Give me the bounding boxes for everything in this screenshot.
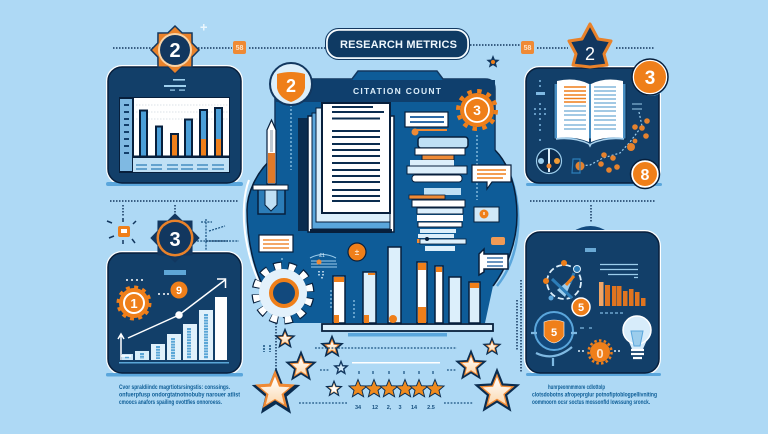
icon: gear 0: 0 — [596, 346, 604, 361]
text block: right caption: clotsdobotns afropeprglur potnofiptoblogpellivniting — [532, 392, 657, 398]
icon: microphone badge 5 — [531, 312, 577, 366]
star: navy outline small — [335, 362, 347, 373]
star: large left — [255, 370, 297, 411]
icon: stack of books — [407, 137, 468, 251]
icon: white sparkle — [200, 24, 207, 30]
panel: bottom-right insights — [524, 226, 661, 376]
small table icon: £1 — [319, 253, 325, 259]
numbers under stars: 12 — [372, 405, 378, 411]
icon: scales emblem — [536, 148, 562, 174]
panel: top-left bar chart — [106, 65, 243, 186]
icon: orange circle number 9: 9 — [176, 285, 182, 297]
text block: left caption: onfuerpfusp ondorgtatnotnobuby narouer atlist — [119, 392, 241, 398]
small table icon — [310, 253, 337, 280]
text block: right caption: hunrpeonnmmore cdlottolp — [548, 384, 605, 391]
title pill: RESEARCH METRICS — [340, 39, 457, 51]
icon: large gear — [251, 261, 315, 325]
icon: open book — [554, 80, 626, 146]
icon: small person pins — [264, 345, 270, 352]
icon: small orange burst — [107, 218, 136, 244]
numbers under stars: 14 — [411, 405, 418, 411]
panel: central citation count — [244, 71, 518, 336]
small tick marks above stars — [359, 371, 433, 374]
icon: orange circle 5: 5 — [578, 302, 584, 314]
icon: small orange sparkle — [486, 55, 500, 68]
text block: left caption: cmoocs anafors spailing ovottfies onnoroess. — [119, 399, 222, 406]
icon: orange circle 5 — [572, 298, 590, 316]
text lines — [600, 264, 638, 278]
star: large right — [477, 370, 517, 409]
trend arrow — [118, 279, 226, 360]
badge: shield number 2 — [270, 63, 312, 105]
orange bar chart — [599, 282, 646, 306]
icon: network of orange nodes — [572, 104, 650, 173]
chart baseline — [322, 324, 493, 336]
growth bars — [119, 297, 229, 364]
badge: circle number 8 — [630, 160, 660, 188]
text block: right caption: oommoorn ocsr soctus mossonfld lowssung sronck. — [532, 399, 650, 406]
text block: left caption: Cvor spraldiindc magrtiotsrsingstis: conssings. — [119, 384, 230, 391]
decorative dot grid — [534, 80, 546, 141]
badge: number 2 top-left — [151, 26, 199, 74]
icon: microphone badge 5: 5 — [551, 327, 557, 339]
star: small right — [484, 338, 500, 354]
star: small left — [276, 330, 294, 347]
numbers under stars: 2, — [387, 405, 392, 411]
speech bubble right — [479, 249, 508, 275]
icon: gear 0 — [578, 340, 621, 364]
badge: circle number 8: 8 — [641, 167, 650, 184]
small orange note — [491, 237, 505, 245]
text block: left caption — [119, 384, 241, 406]
badge: star number 2: 2 — [585, 44, 595, 64]
stars: rating decoration — [255, 330, 517, 411]
badge: circle number 3: 3 — [645, 68, 655, 89]
icon: small orange tag top-right — [521, 41, 534, 54]
icon: paper stack — [298, 103, 394, 233]
icon: small orange tag top-left: 58 — [236, 45, 243, 52]
note with orange lines — [259, 235, 293, 252]
icon: compass dial — [543, 260, 581, 300]
panel: bottom-left growth chart — [106, 251, 243, 376]
numbers under stars — [355, 405, 435, 411]
title pill — [326, 28, 470, 60]
dotted lines around stars — [299, 348, 473, 403]
star rating row — [349, 380, 444, 397]
badge: gear number 3: 3 — [473, 102, 481, 118]
star: small on dotted line — [322, 336, 342, 356]
speech bubble with orange lines — [472, 165, 511, 189]
icon: pencil in holder — [253, 120, 288, 214]
numbers under stars: 3 — [398, 405, 402, 411]
speech note with blue lines — [405, 112, 448, 136]
badge: number 2 top-left: 2 — [169, 40, 181, 62]
badge: number 3 left — [151, 214, 199, 262]
icon: small orange tag top-right: 58 — [524, 45, 531, 52]
orange circle label: ± — [355, 248, 360, 257]
icon: gear number 1: 1 — [130, 296, 138, 311]
numbers under stars: 2.5 — [427, 405, 435, 411]
icon: light bulb — [623, 316, 651, 358]
badge: number 3 left: 3 — [169, 229, 181, 251]
label: small note right of badge 3 — [197, 219, 239, 250]
badge: gear number 3 — [458, 91, 496, 129]
numbers under stars: 34 — [355, 405, 362, 411]
star: medium left — [287, 352, 315, 379]
orange circle label — [348, 243, 366, 261]
heading: citation count: CITATION COUNT — [353, 86, 442, 96]
icon: small orange tag top-left — [233, 41, 246, 54]
bar chart: six bars — [119, 97, 230, 173]
badge: star number 2 — [569, 24, 611, 67]
panel: top-right open book — [524, 66, 662, 186]
star: pale small — [327, 381, 341, 395]
badge: shield number 2: 2 — [286, 76, 296, 96]
bar chart: citations — [333, 247, 480, 323]
speech note with orange marker — [474, 207, 499, 222]
text block: right caption — [532, 384, 657, 406]
badge: circle number 3 — [632, 59, 668, 96]
star: medium right — [457, 352, 485, 378]
